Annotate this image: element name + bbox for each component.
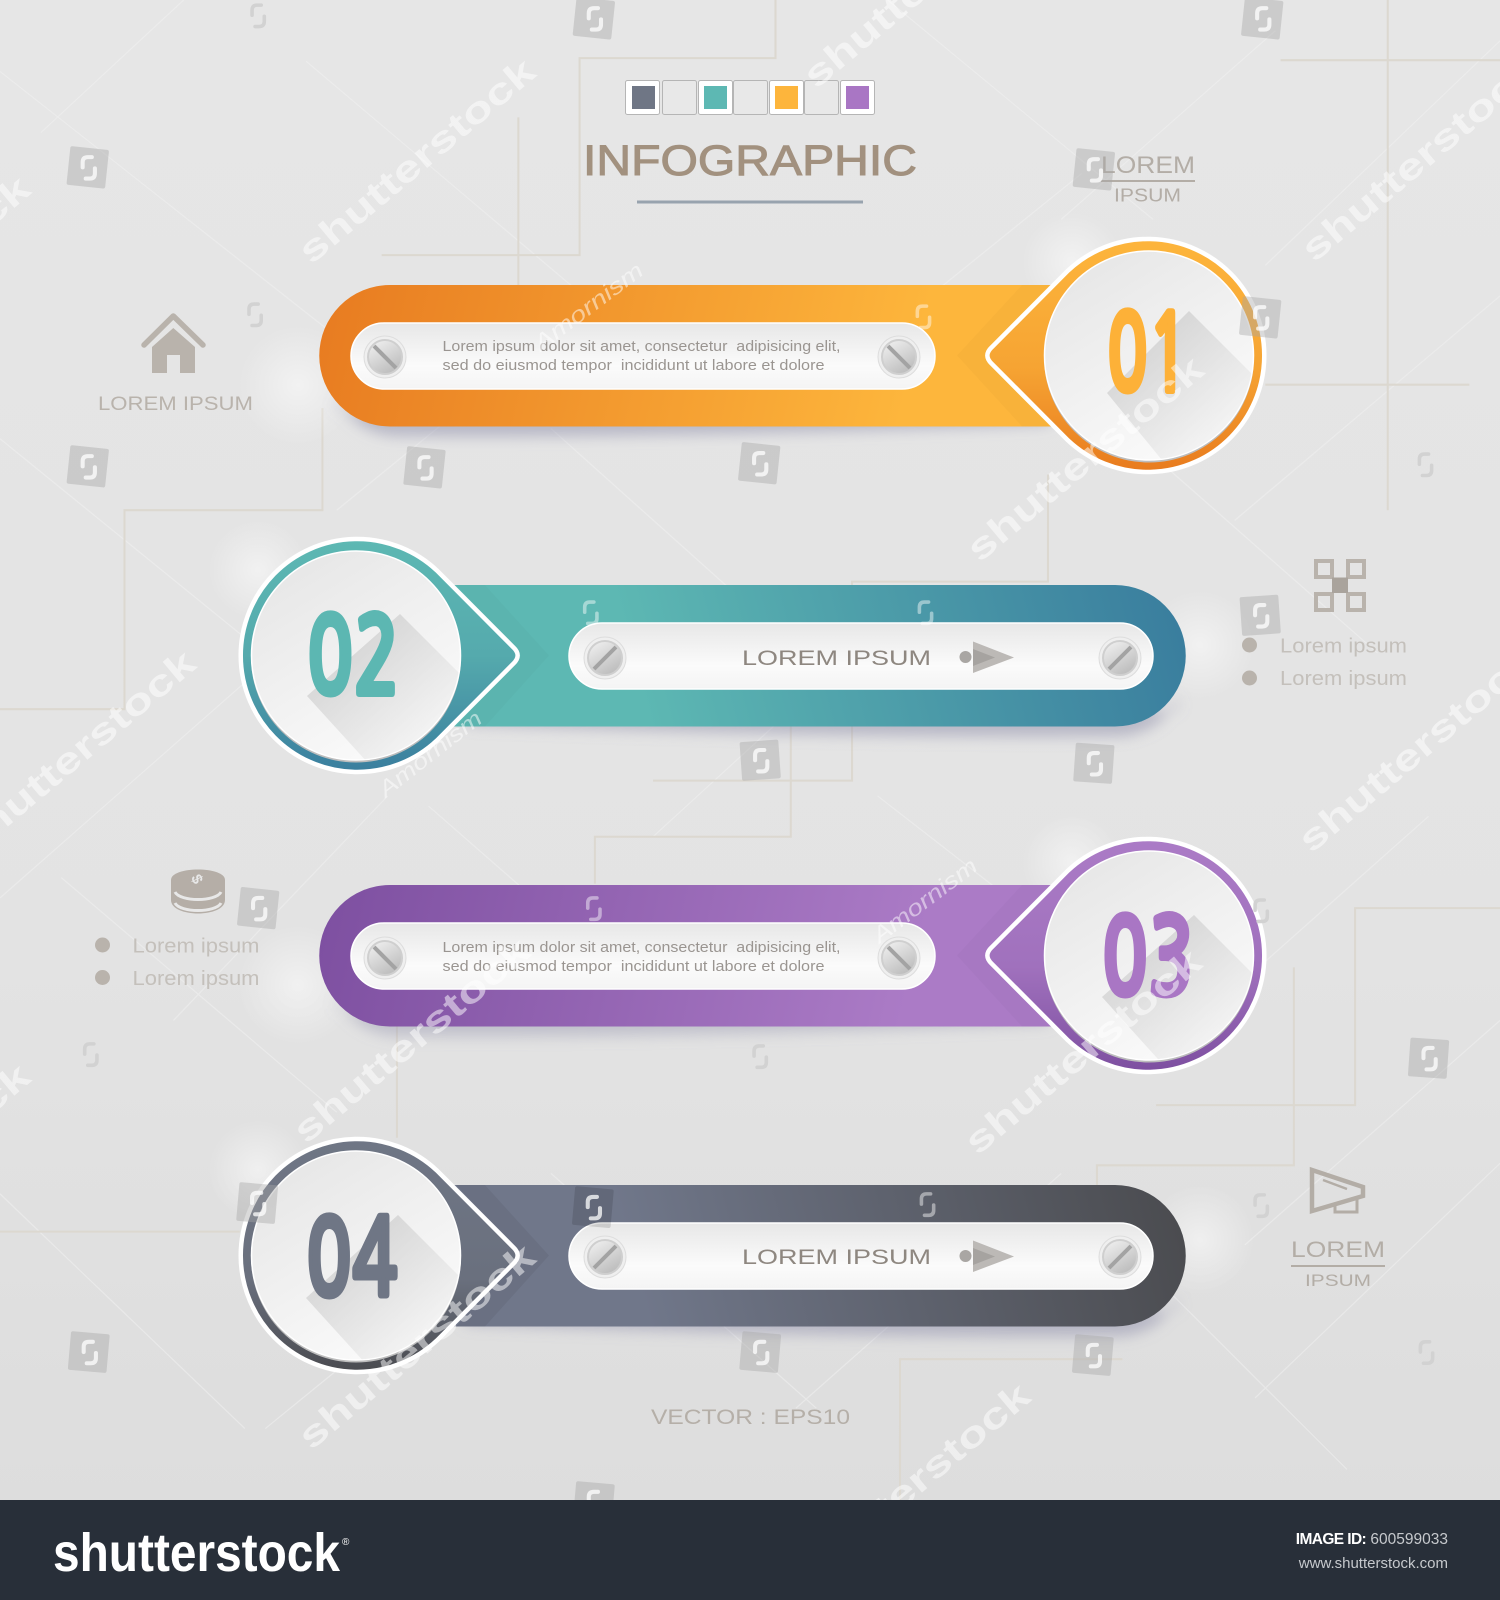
teardrop badge 02: 02 <box>307 605 400 710</box>
glow highlights <box>208 212 1255 1295</box>
pill: row 3 text <box>351 923 935 989</box>
watermark text: shutterstock <box>1293 47 1500 269</box>
pill: row 2 label: LOREM IPSUM <box>742 647 931 670</box>
pill: row 3 text: sed do eiusmod tempor incididunt ut labore et dolore <box>442 958 824 975</box>
title <box>583 137 917 204</box>
side label: top right lorem ipsum <box>1101 152 1195 206</box>
pill: row 4 label <box>569 1223 1153 1289</box>
color legend swatches <box>626 80 874 114</box>
title: INFOGRAPHIC <box>583 137 917 185</box>
icon: megaphone with label <box>1291 1170 1385 1290</box>
watermark text: shutterstock <box>1290 638 1500 860</box>
screws <box>364 336 920 378</box>
screws <box>584 1236 1141 1278</box>
screws <box>364 937 920 979</box>
side label: top right lorem ipsum: LOREM <box>1101 152 1195 179</box>
icon: coins with bullet list: Lorem ipsum <box>132 968 260 990</box>
watermark text: Amornism <box>866 853 982 949</box>
watermark text: Amornism <box>371 706 487 803</box>
watermark text: shutterstock <box>958 347 1212 569</box>
icon: coins with bullet list: Lorem ipsum <box>132 936 260 958</box>
pill: row 2 label <box>569 623 1153 689</box>
panel: row 3 purple <box>319 836 1266 1074</box>
footer caption vector eps10: VECTOR : EPS10 <box>651 1406 850 1429</box>
side label: top right lorem ipsum: IPSUM <box>1114 186 1181 206</box>
teardrop badge 04 <box>238 1136 520 1374</box>
pill: row 1 text: Lorem ipsum dolor sit amet, consectetur adipisicing elit, <box>442 338 840 355</box>
watermark text: shutterstock <box>290 1235 544 1457</box>
panel: row 4 gray <box>238 1136 1186 1374</box>
panel: row 1 orange <box>319 236 1266 474</box>
watermark text: shutterstock <box>290 49 544 271</box>
arrow <box>960 642 1014 673</box>
icon: house with label <box>98 316 253 415</box>
watermark text: shutterstock <box>785 1374 1039 1596</box>
icon: house with label: LOREM IPSUM <box>98 393 253 415</box>
teardrop badge 04: 04 <box>306 1207 398 1312</box>
arrow <box>960 1240 1014 1272</box>
panel: row 2 teal <box>238 536 1186 774</box>
icon: grid with bullet list <box>1242 561 1407 690</box>
icon: grid with bullet list: Lorem ipsum <box>1280 668 1407 690</box>
icon: coins with bullet list <box>95 870 260 990</box>
registered mark: ® <box>342 1537 350 1548</box>
image id: IMAGE ID: 600599033 <box>1296 1531 1448 1548</box>
pill: row 4 label: LOREM IPSUM <box>742 1246 931 1269</box>
icon: megaphone with label: LOREM <box>1291 1237 1385 1262</box>
teardrop badge 02 <box>238 536 520 774</box>
icon: coins with bullet list: $ <box>187 872 206 887</box>
footer logo: shutterstock <box>53 1523 341 1583</box>
teardrop badge 01 <box>985 236 1266 474</box>
teardrop badge 01: 01 <box>1107 302 1189 407</box>
teardrop badge 03: 03 <box>1102 906 1194 1011</box>
website: www.shutterstock.com <box>1298 1555 1448 1572</box>
icon: megaphone with label: IPSUM <box>1305 1271 1371 1290</box>
teardrop badge 03 <box>985 836 1266 1074</box>
watermark text: shutterstock <box>285 929 539 1151</box>
screws <box>584 637 1141 679</box>
footer bar <box>0 1500 1500 1600</box>
pill: row 3 text: Lorem ipsum dolor sit amet, consectetur adipisicing elit, <box>442 939 840 956</box>
pill: row 1 text: sed do eiusmod tempor incididunt ut labore et dolore <box>442 357 824 374</box>
pill: row 1 text <box>351 323 935 389</box>
watermark text: Amornism <box>527 257 648 358</box>
watermark text: shutterstock <box>956 940 1210 1162</box>
icon: grid with bullet list: Lorem ipsum <box>1280 636 1407 658</box>
